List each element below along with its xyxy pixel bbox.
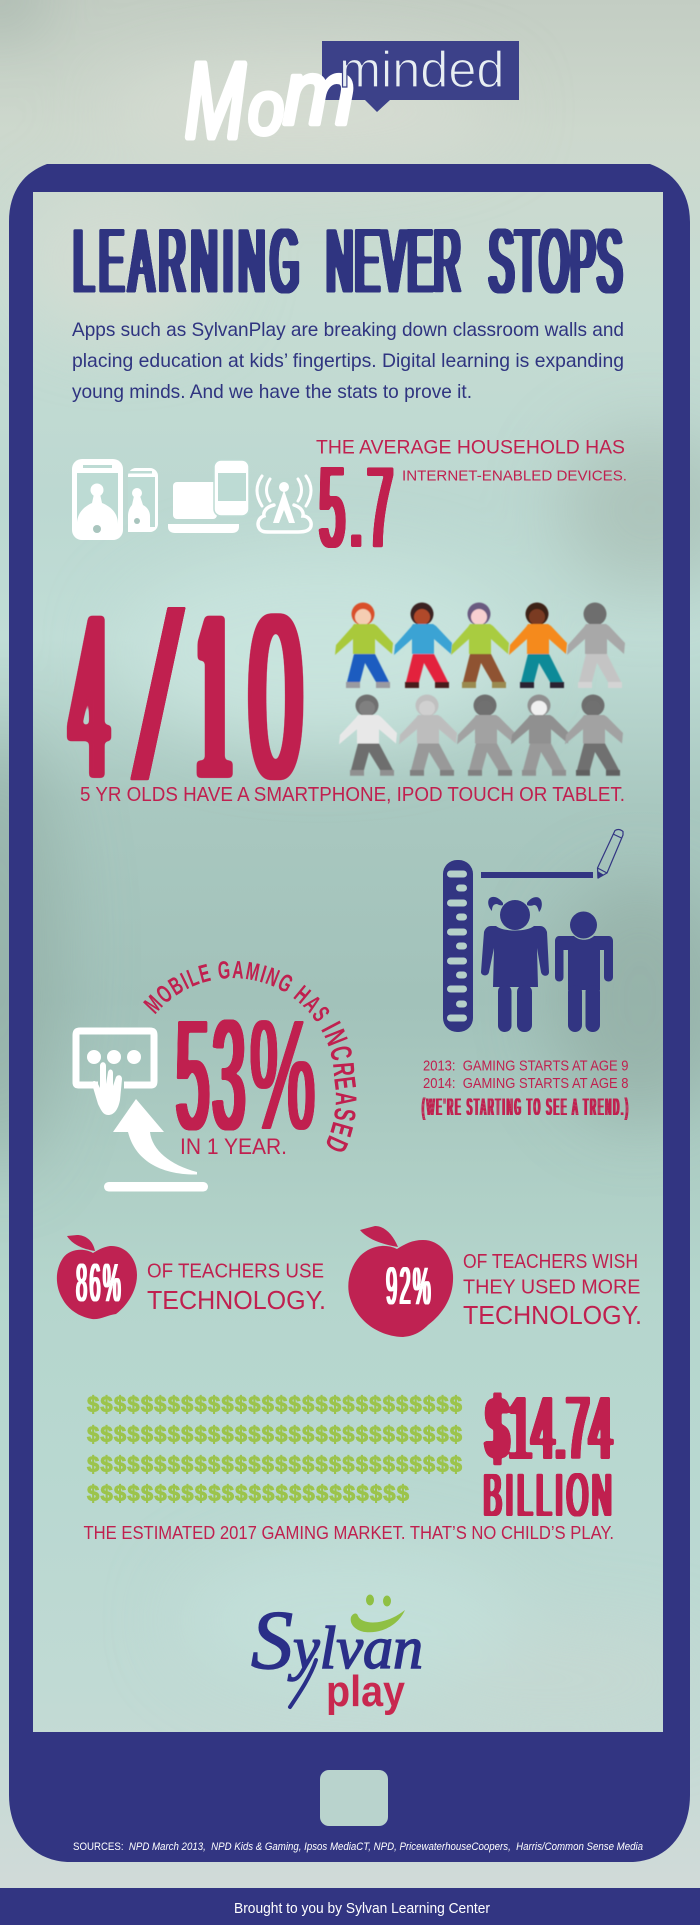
icon: tablet [214,460,249,516]
stat: 92% of teachers [348,1226,642,1337]
intro text: placing education at kids’ fingertips. Digital learning is expanding [72,350,624,372]
child 9 [511,695,569,776]
child 4 [509,602,567,688]
stat: 86% of teachers [57,1235,326,1319]
footer bar [0,1888,700,1925]
infographic canvas: % [250,988,315,1163]
line 2014: 2014: GAMING STARTS AT AGE 8 [423,1075,628,1092]
stat number: 4/10: 4 [70,565,108,829]
icon: boy [555,912,613,1032]
child 6 [339,695,397,776]
stat number: 4/10: / [132,565,184,829]
logo: Sylvan play [251,1594,423,1716]
text line 3: TECHNOLOGY. [463,1300,642,1330]
dots [87,1050,141,1064]
intro text: Apps such as SylvanPlay are breaking down classroom walls and [72,319,624,341]
logo: Mom Minded [185,41,519,160]
dollar sign rows [87,1392,462,1506]
arrow [113,1099,197,1175]
ground bar [104,1182,208,1192]
icon: apple large [348,1226,453,1337]
word: Mom: o [248,66,284,151]
child 8 [457,695,515,776]
word: minded: minded [339,41,504,98]
icon: phone large [72,459,123,540]
paper children illustration [335,602,625,776]
child 1 [335,602,393,688]
icon: wifi tower [257,476,311,532]
word: play: play [326,1667,405,1716]
intro text: young minds. And we have the stats to prove it. [72,381,472,403]
child 3 [451,602,509,688]
touch screen outline [76,1031,154,1085]
stat: 5.7 devices [316,438,627,572]
child 7 [399,695,457,776]
drawn line [481,872,593,878]
child 5 [567,602,625,688]
stat: 92% of teachers: 92% [386,1257,433,1316]
stat number: 4/10: 1 [201,565,227,829]
caption: gaming market: THE ESTIMATED 2017 GAMING MARKET. THAT’S NO CHILD’S PLAY. [84,1523,614,1543]
icon: apple small [57,1235,137,1319]
icon: girl [481,897,549,1032]
title: NEVER [326,210,462,312]
footer text: Brought to you by Sylvan Learning Center [234,1901,490,1917]
stat: 86% of teachers: 86% [76,1253,123,1313]
flourish: y tail [290,1660,316,1707]
word: Mom: m [283,44,355,144]
home button [320,1770,388,1826]
stat number: 53%: 5 [176,988,209,1163]
stat number: 53%: 3 [213,988,245,1163]
text line 1: OF TEACHERS USE [147,1260,324,1282]
intro text [72,319,624,403]
word: Sylvan: Sylvan [251,1594,423,1687]
stat number: 4/10 [70,565,302,829]
ruler [443,860,473,1032]
text line 1: OF TEACHERS WISH [463,1251,638,1273]
caption: 5 yr olds: 5 YR OLDS HAVE A SMARTPHONE, IPOD TOUCH OR TABLET. [80,784,625,806]
icon: phone small [128,468,158,532]
dollar sign rows: $$$$$$$$$$$$$$$$$$$$$$$$$$$$ [87,1422,462,1447]
text: household: THE AVERAGE HOUSEHOLD HAS [316,438,625,458]
line 2013: 2013: GAMING STARTS AT AGE 9 [423,1058,628,1074]
hand [92,1062,122,1115]
curved heading: mobile gaming: MOBILE GAMING HAS INCREASED [143,961,356,1152]
word: Mom: M [185,42,245,160]
dollar sign rows: $$$$$$$$$$$$$$$$$$$$$$$$$$$$ [87,1452,462,1477]
text: gaming start ages [422,1058,630,1121]
text: in 1 year: IN 1 YEAR. [180,1134,287,1159]
infographic canvas: 0 [249,565,302,829]
title: LEARNING [73,210,304,312]
text line 2: TECHNOLOGY. [147,1285,326,1315]
icon: touch screen with arrow [76,1031,208,1192]
speech bubble box [322,41,519,112]
icon: pencil [598,829,623,878]
dollar sign rows: $$$$$$$$$$$$$$$$$$$$$$$$$$$$ [87,1392,462,1417]
child 2 [394,602,452,688]
text line 2: THEY USED MORE [463,1276,640,1298]
dollar sign rows: $$$$$$$$$$$$$$$$$$$$$$$$ [87,1481,409,1506]
stat number: 53% [176,988,315,1163]
text: devices: INTERNET-ENABLED DEVICES. [402,468,627,484]
stat: 5.7 devices: 5.7 [320,442,398,572]
word: Mom [185,42,355,160]
height chart illustration [443,829,623,1032]
child 10 [565,695,623,776]
icon: laptop [168,482,239,533]
icons: connected devices [72,459,311,540]
smile icon [351,1594,405,1632]
